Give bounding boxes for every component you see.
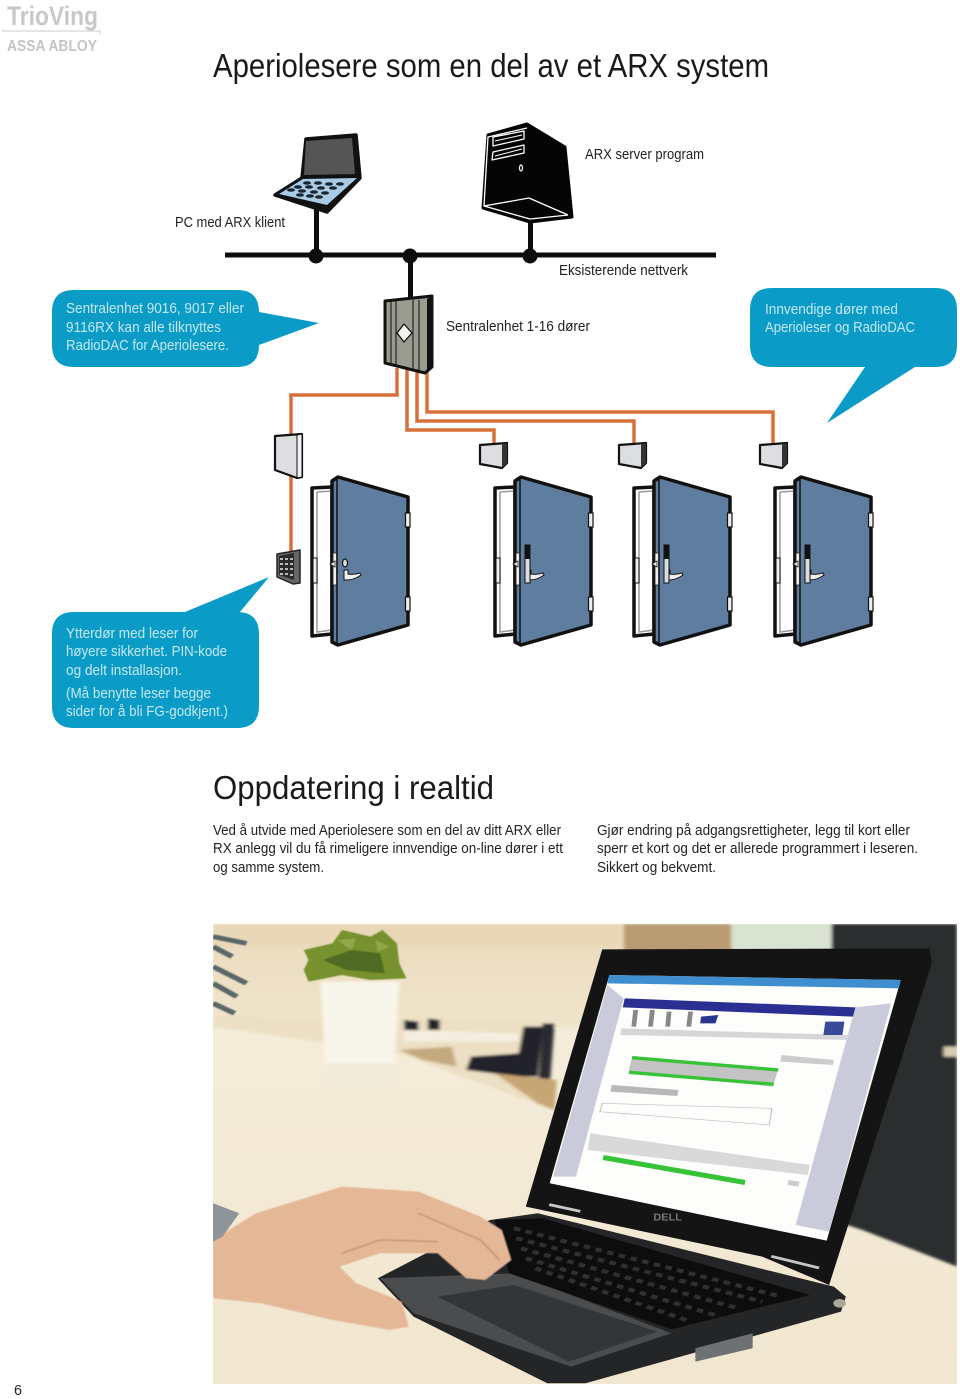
icon: reader power box left — [275, 434, 302, 478]
icon: door box 3 — [760, 443, 787, 468]
callout: Ytterdør: (Må benytte leser begge — [66, 686, 211, 702]
icon: ARX server — [483, 124, 572, 222]
callout: Sentralenhet 9016: RadioDAC for Aperiolesere. — [66, 338, 229, 354]
icon: door box 1 — [480, 443, 507, 468]
text block right: Sikkert og bekvemt. — [597, 860, 716, 876]
laptop lid — [526, 948, 932, 1285]
logo: TrioVing ASSA ABLOY — [3, 1, 100, 55]
logo: TrioVing ASSA ABLOY: ASSA ABLOY — [7, 38, 97, 55]
photo: hand on laptop — [213, 924, 957, 1384]
text block right — [597, 823, 918, 876]
callout: Innvendige dører: Aperioleser og RadioDAC — [765, 320, 915, 336]
callout: Sentralenhet 9016 — [52, 290, 319, 367]
callout: Ytterdør: sider for å bli FG-godkjent.) — [66, 704, 228, 720]
text block left: Ved å utvide med Aperiolesere som en del av ditt ARX eller — [213, 823, 561, 839]
label: PC med ARX klient: PC med ARX klient — [175, 215, 285, 231]
logo: TrioVing ASSA ABLOY: TrioVing — [7, 1, 98, 31]
callout: Sentralenhet 9016: 9116RX kan alle tilknyttes — [66, 320, 221, 336]
door: interior with reader 1 — [495, 477, 593, 645]
callout: Ytterdør: Ytterdør med leser for — [66, 626, 198, 642]
door: interior with reader 3 — [775, 477, 873, 645]
icon: central unit — [385, 296, 432, 373]
icon: keypad reader — [277, 550, 300, 584]
laptop base — [378, 1213, 846, 1383]
text block right: Gjør endring på adgangsrettigheter, legg til kort eller — [597, 823, 910, 839]
callout: Ytterdør: og delt installasjon. — [66, 663, 182, 679]
door: interior with reader 2 — [634, 477, 732, 645]
page number: 6 — [14, 1383, 22, 1399]
heading: Oppdatering i realtid: Oppdatering i realtid — [213, 769, 494, 806]
text block left — [213, 823, 563, 876]
hand — [213, 1187, 512, 1330]
callout: Innvendige dører: Innvendige dører med — [765, 302, 898, 318]
callout: Innvendige dører — [750, 288, 957, 423]
door: exterior with cylinder — [312, 477, 410, 645]
label: ARX server program: ARX server program — [585, 147, 704, 163]
orange wiring — [291, 368, 773, 552]
photo: hand on laptop: DELL — [653, 1212, 682, 1223]
icon: PC laptop — [275, 135, 360, 212]
callout: Ytterdør: høyere sikkerhet. PIN-kode — [66, 644, 227, 660]
text block left: og samme system. — [213, 860, 324, 876]
callout: Ytterdør — [52, 577, 269, 728]
icon: door box 2 — [619, 443, 646, 468]
text block left: RX anlegg vil du få rimeligere innvendige on-line dører i ett — [213, 841, 563, 857]
network line with nodes — [225, 205, 716, 297]
title: Aperiolesere som en del av et ARX system — [213, 47, 769, 84]
label: Sentralenhet 1-16 dører: Sentralenhet 1-16 dører — [446, 319, 590, 335]
network diagram — [175, 124, 773, 552]
text block right: sperr et kort og det er allerede programmert i leseren. — [597, 841, 918, 857]
callout: Sentralenhet 9016: Sentralenhet 9016, 9017 eller — [66, 301, 244, 317]
label: Eksisterende nettverk: Eksisterende nettverk — [559, 263, 689, 279]
